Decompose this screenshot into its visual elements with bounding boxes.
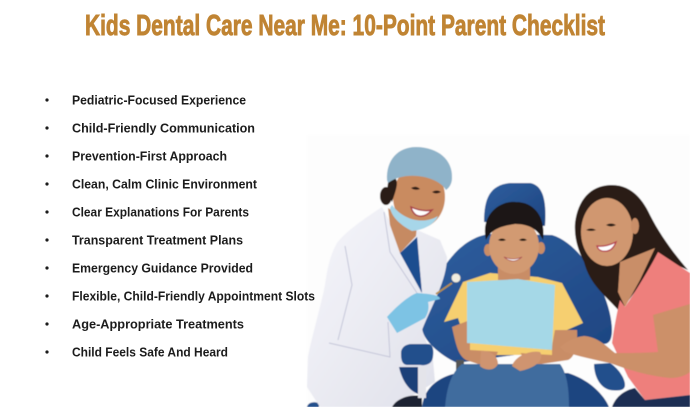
yellow hem xyxy=(470,343,552,355)
face xyxy=(393,166,445,228)
neck and chest xyxy=(618,248,655,307)
hands xyxy=(480,351,541,371)
smile xyxy=(411,207,432,216)
sleeve and lapel lines xyxy=(329,212,421,357)
eyes xyxy=(498,238,527,241)
white coat xyxy=(307,207,447,407)
item 7: Emergency Guidance Provided xyxy=(72,260,253,276)
checklist xyxy=(45,92,315,360)
ears xyxy=(484,244,492,256)
trousers xyxy=(392,395,422,407)
item 10: Child Feels Safe And Heard xyxy=(72,344,228,360)
mask xyxy=(390,205,438,231)
item 6: Transparent Treatment Plans xyxy=(72,232,243,248)
glove xyxy=(387,293,440,333)
item 3: Prevention-First Approach xyxy=(72,148,227,164)
neck xyxy=(388,208,417,253)
chair armrest and post xyxy=(399,344,433,398)
arm and hand xyxy=(560,304,690,378)
yellow shirt xyxy=(444,273,583,355)
mirror xyxy=(436,283,452,294)
jeans xyxy=(445,364,569,407)
cap xyxy=(387,147,452,190)
eyes xyxy=(411,187,441,194)
item 1: Pediatric-Focused Experience xyxy=(72,92,246,108)
child xyxy=(444,202,583,407)
trousers xyxy=(612,388,690,407)
face xyxy=(489,218,539,274)
eyes xyxy=(586,224,616,231)
hairline xyxy=(387,176,397,202)
item 8: Flexible, Child-Friendly Appointment Slots xyxy=(72,288,315,304)
coral shirt xyxy=(612,252,690,400)
arms xyxy=(452,320,577,368)
smile xyxy=(597,242,616,251)
neck xyxy=(498,262,530,280)
hair xyxy=(575,185,688,312)
face xyxy=(581,198,633,266)
hair xyxy=(485,202,543,240)
item 4: Clean, Calm Clinic Environment xyxy=(72,176,258,192)
photo: dentist, child and parent xyxy=(307,135,690,407)
mother xyxy=(560,185,690,407)
smile xyxy=(504,257,522,261)
bib xyxy=(467,279,555,350)
hair bun xyxy=(380,187,392,205)
scrubs xyxy=(400,237,422,293)
dental chair xyxy=(307,183,625,407)
item 5: Clear Explanations For Parents xyxy=(72,204,249,220)
item 9: Age-Appropriate Treatments xyxy=(72,316,244,332)
item 2: Child-Friendly Communication xyxy=(72,120,255,136)
dentist xyxy=(307,147,460,407)
ear xyxy=(631,218,639,234)
